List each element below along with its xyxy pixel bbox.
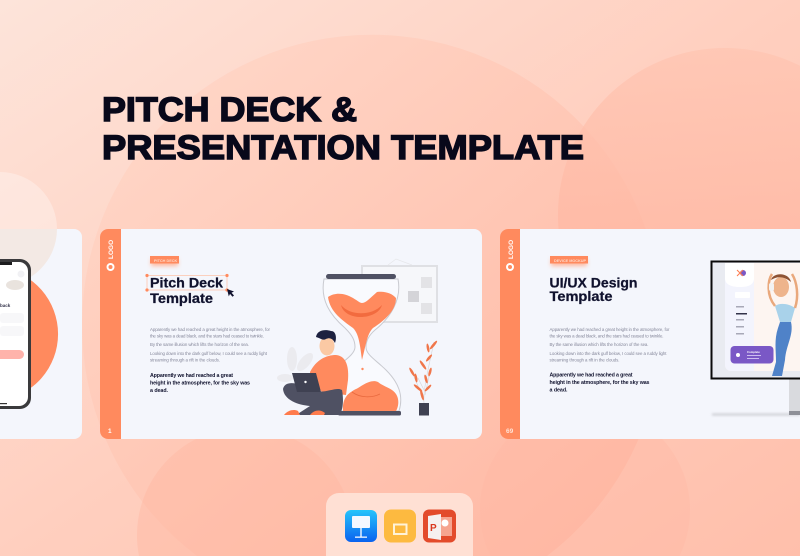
- icon: Keynote: [345, 510, 377, 542]
- panel: right slide (UI/UX design): 69: [506, 428, 514, 435]
- title: [102, 91, 584, 167]
- bold statement: a dead.: [550, 388, 568, 394]
- icon: Google Slides: [384, 510, 416, 542]
- orange circle: [0, 268, 58, 400]
- phone mockup: [0, 259, 31, 409]
- bold statement: height in the atmosphere, for the sky was: [550, 380, 650, 386]
- panel: app icons: [326, 493, 473, 556]
- bold statement: Apparently we had reached a great: [550, 372, 633, 378]
- monitor mockup: [712, 262, 800, 416]
- phone mockup: back: [0, 303, 11, 308]
- side bar: [100, 229, 121, 439]
- head: [320, 336, 334, 356]
- body text: Apparently we had reached a great height in the atmosphere, for: [550, 327, 670, 332]
- laptop: [292, 373, 321, 392]
- body text: Apparently we had reached a great height in the atmosphere, for: [150, 327, 271, 332]
- body text: streaming through a rift in the clouds.: [550, 358, 620, 362]
- body text: the sky was a dead black, and the stars had ceased to twinkle.: [150, 334, 264, 338]
- legs: [283, 383, 343, 415]
- bold statement: Apparently we had reached a great: [150, 373, 233, 379]
- title: PRESENTATION TEMPLATE: [102, 129, 584, 167]
- tag: [150, 256, 179, 266]
- icon: PowerPoint: P: [430, 523, 437, 534]
- body text: [550, 327, 670, 362]
- bold statement: [550, 372, 650, 394]
- body text: [150, 327, 271, 362]
- bold statement: height in the atmosphere, for the sky was: [150, 380, 250, 386]
- bold statement: a dead.: [150, 388, 169, 394]
- side bar: LOGO: [108, 240, 115, 259]
- icon: PowerPoint: [423, 510, 456, 542]
- body text: streaming through a rift in the clouds.: [150, 358, 220, 362]
- side bar: 1: [108, 428, 112, 435]
- body text: By the same illusion which lifts the horizon of the sea.: [550, 342, 648, 347]
- app window: [725, 263, 800, 371]
- side bar: [500, 229, 520, 439]
- tag: PITCH DECK: [154, 259, 177, 263]
- monitor mockup: Complete: [747, 350, 760, 354]
- body text: Looking down into the dark gulf below, I could see a ruddy light: [150, 351, 268, 356]
- heading with selection box: Template: [150, 291, 214, 306]
- illustration: wall picture: [362, 259, 437, 322]
- illustration: potted plant: [408, 340, 438, 416]
- torso: [310, 355, 348, 395]
- panel: right slide (UI/UX design): LOGO: [508, 240, 515, 259]
- panel: right slide (UI/UX design): DEVICE MOCKUP: [554, 259, 587, 263]
- heading: UI/UX Design: [550, 276, 638, 290]
- bold statement: [150, 373, 250, 394]
- illustration: person with laptop: [283, 330, 348, 415]
- panel: right slide (UI/UX design): [500, 229, 800, 439]
- heading with selection box: [145, 274, 234, 306]
- title: PITCH DECK &: [102, 91, 357, 129]
- illustration: hourglass: [323, 274, 401, 416]
- heading with selection box: Pitch Deck: [150, 276, 224, 290]
- panel: left slide (phone mockup): [0, 229, 82, 439]
- purple card: [730, 346, 774, 364]
- body text: Looking down into the dark gulf below, I could see a ruddy light: [550, 351, 667, 356]
- feet: [284, 410, 325, 415]
- body text: the sky was a dead black, and the stars had ceased to twinkle.: [550, 334, 664, 338]
- panel: right slide (UI/UX design): Template: [550, 289, 613, 304]
- panel: middle slide (pitch deck): [100, 229, 482, 439]
- tag: [551, 259, 587, 266]
- illustration: background leaves: [277, 347, 316, 382]
- body text: By the same illusion which lifts the horizon of the sea.: [150, 342, 249, 347]
- 3D figure: [775, 304, 795, 322]
